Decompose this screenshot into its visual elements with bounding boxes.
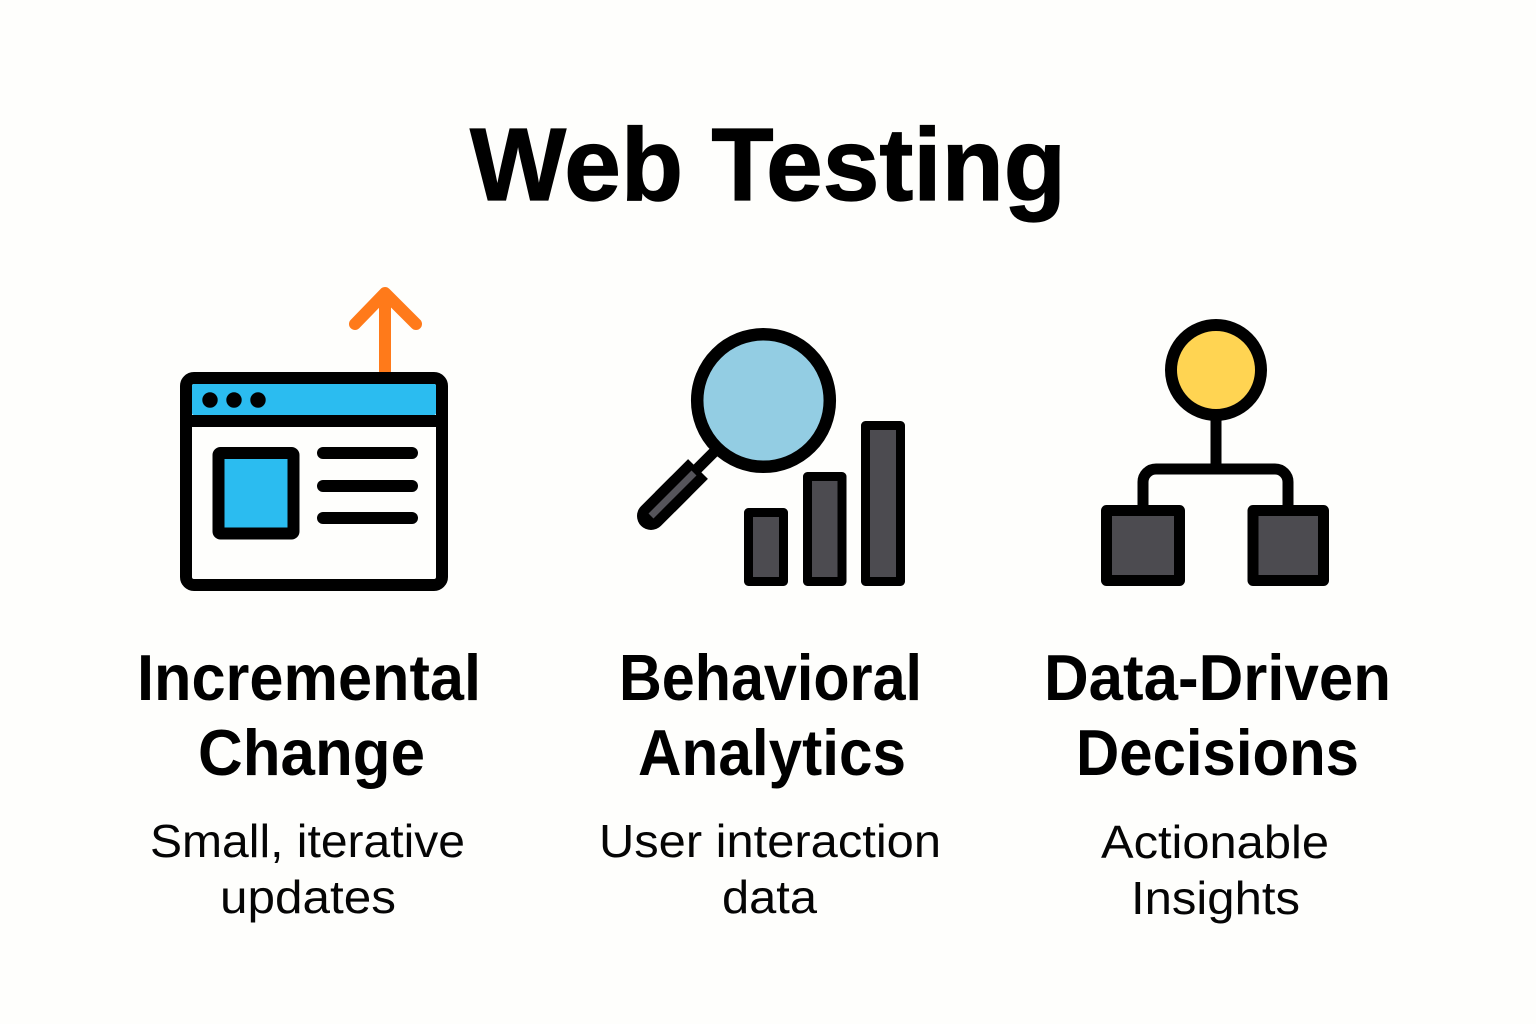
heading: incremental change: Incremental <box>137 641 481 714</box>
heading: behavioral analytics: Analytics <box>638 716 906 789</box>
heading: behavioral analytics: Behavioral <box>619 641 922 714</box>
heading: data-driven decisions <box>1044 641 1391 789</box>
title: Web Testing <box>470 107 1066 222</box>
heading: behavioral analytics <box>619 641 922 789</box>
description: user interaction data: data <box>722 871 817 923</box>
description: actionable insights <box>1101 816 1329 924</box>
description: actionable insights: Insights <box>1131 872 1300 924</box>
description: actionable insights: Actionable <box>1101 816 1329 868</box>
description: user interaction data: User interaction <box>599 815 941 867</box>
heading: data-driven decisions: Data-Driven <box>1044 641 1391 714</box>
arrow: upward orange <box>355 293 416 374</box>
description: small, iterative updates: Small, iterative <box>150 815 465 867</box>
magnifier <box>651 334 830 516</box>
icon: magnifier with bar chart <box>651 334 900 582</box>
heading: data-driven decisions: Decisions <box>1076 716 1359 789</box>
icon: decision tree <box>1106 325 1324 580</box>
heading: incremental change <box>137 641 481 789</box>
icon: browser window with upward arrow <box>186 293 442 585</box>
panel: behavioral analytics <box>599 334 941 923</box>
heading: incremental change: Change <box>198 716 425 789</box>
panel: data-driven decisions <box>1044 325 1391 924</box>
panel: incremental change <box>137 293 481 923</box>
bar chart <box>748 426 900 582</box>
description: small, iterative updates: updates <box>220 871 396 923</box>
description: user interaction data <box>599 815 941 923</box>
description: small, iterative updates <box>150 815 465 923</box>
